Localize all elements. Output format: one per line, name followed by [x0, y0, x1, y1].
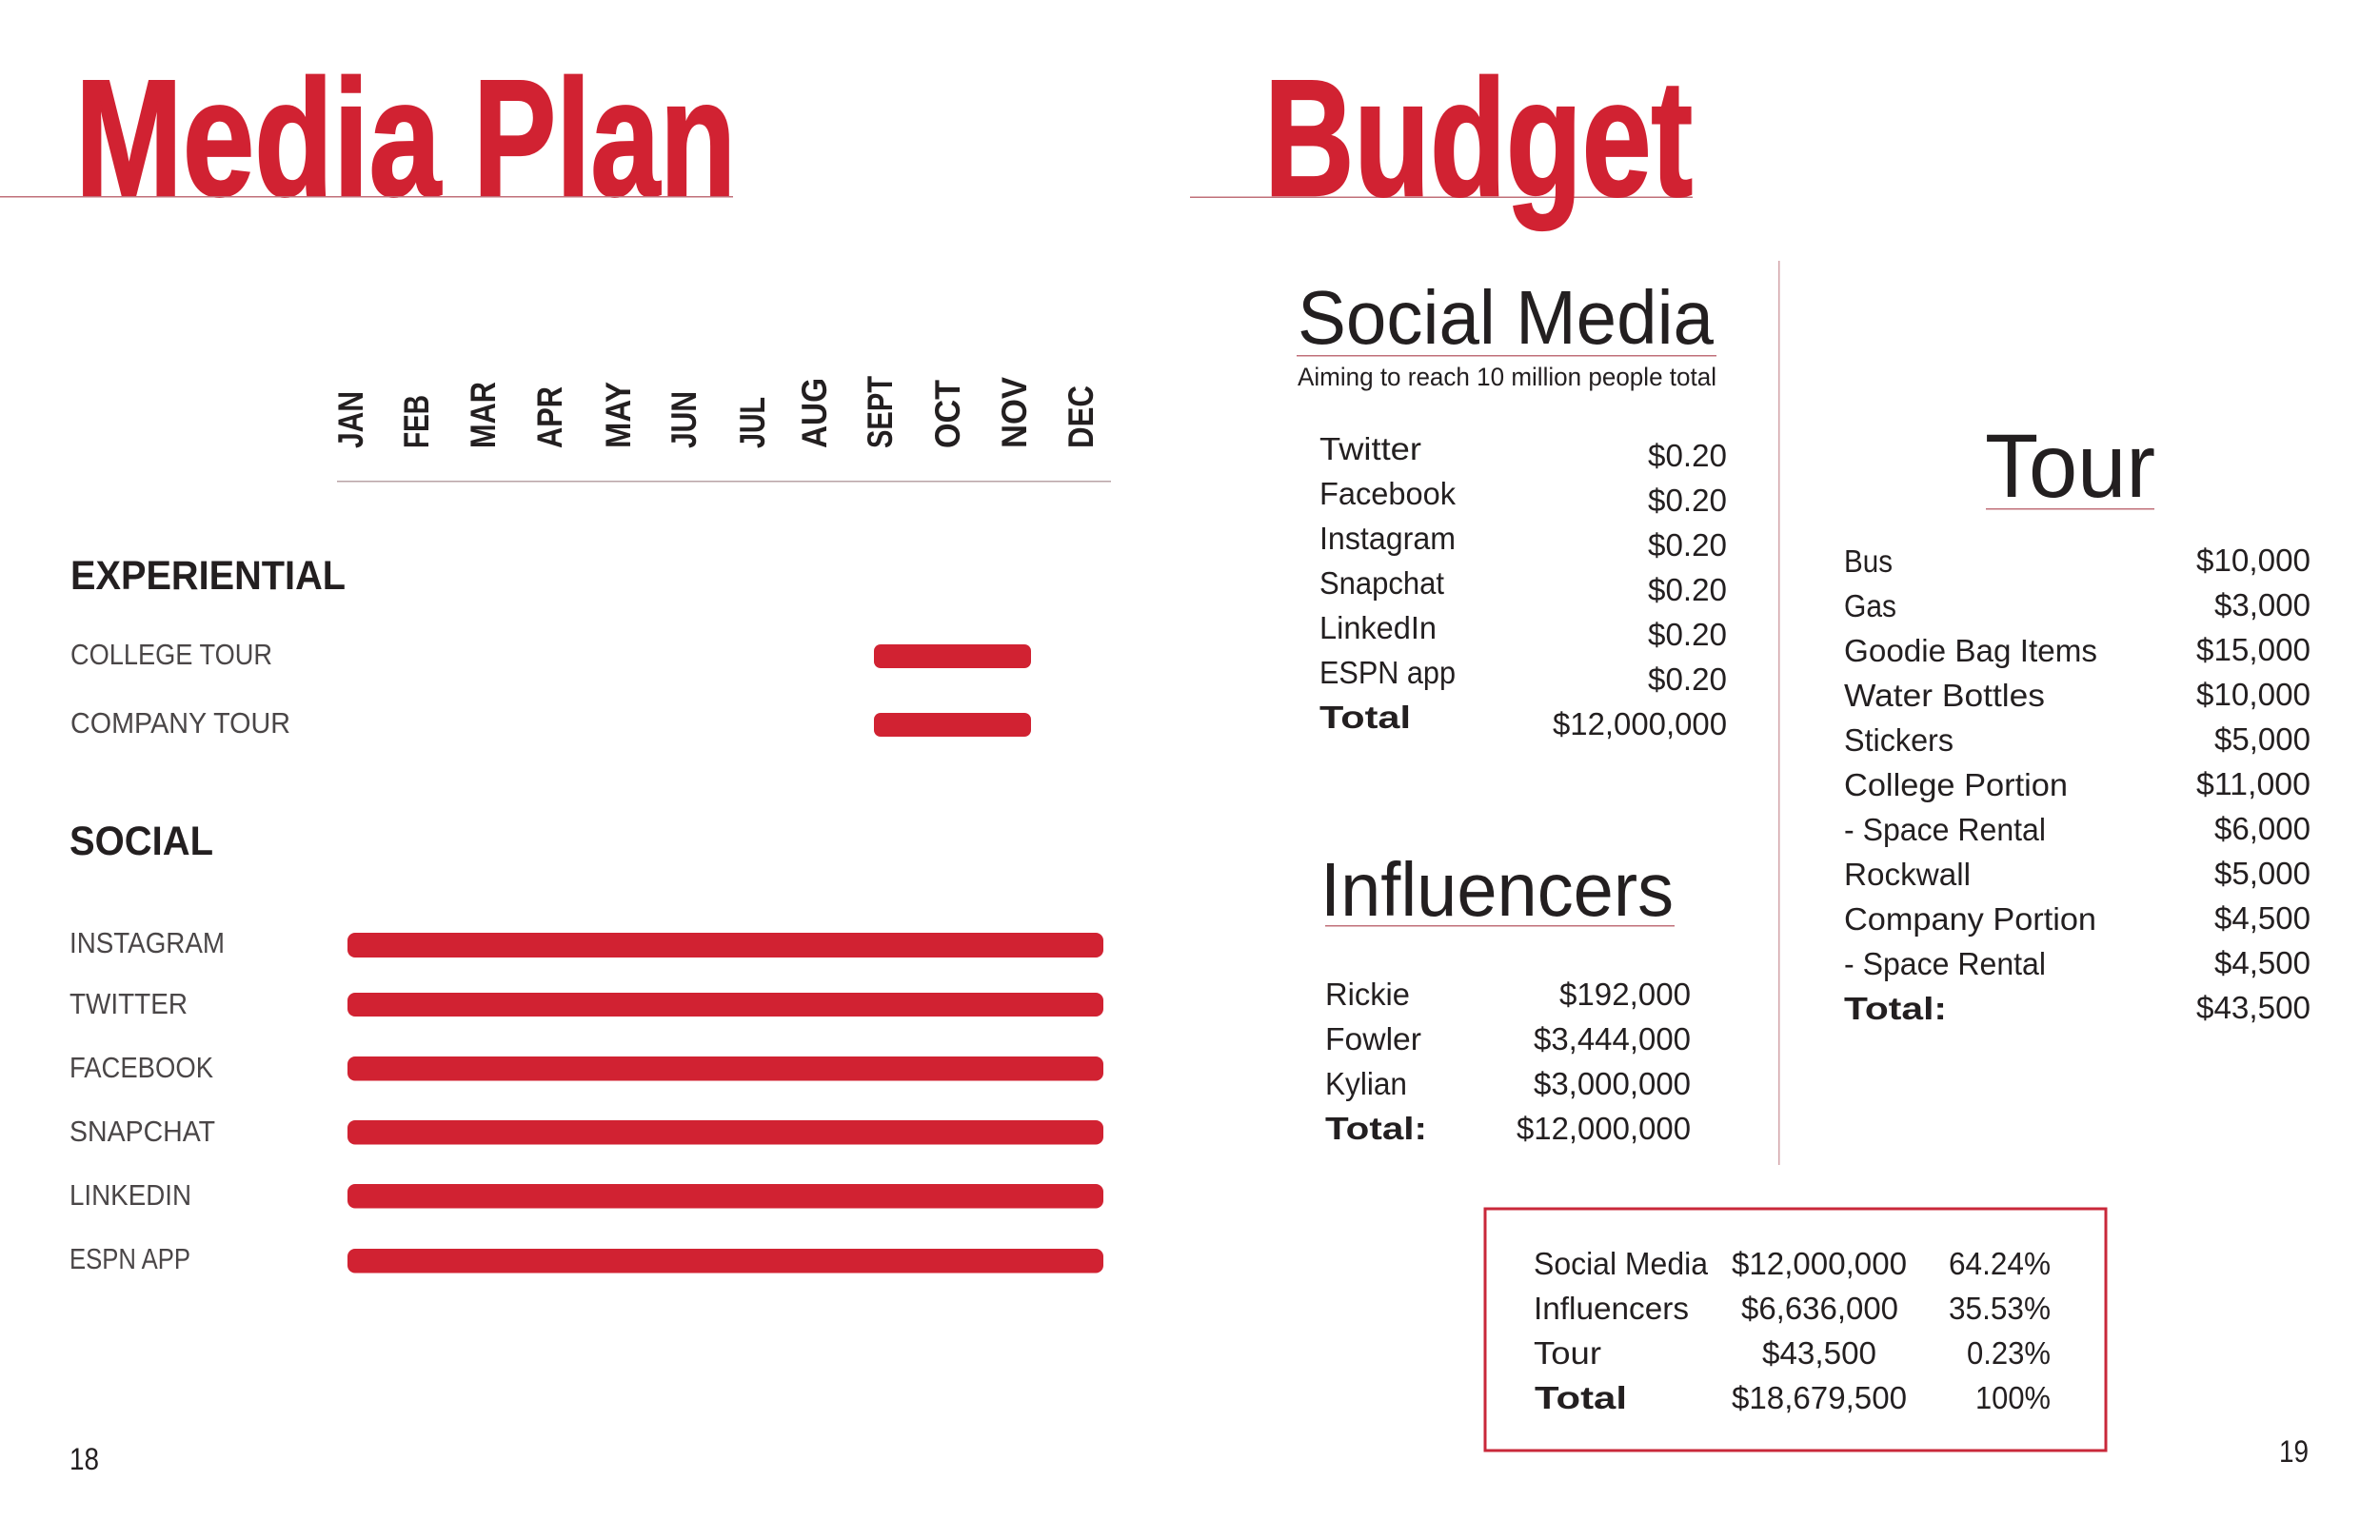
social media labels: Facebook — [1319, 476, 1456, 511]
tour labels: Rockwall — [1844, 857, 1971, 892]
summary row: social media: $12,000,000 — [1732, 1246, 1907, 1281]
summary row: influencers — [1534, 1291, 2051, 1326]
tour values: $11,000 — [2196, 766, 2311, 801]
tour labels — [1844, 543, 2097, 1026]
tour values: $10,000 — [2196, 677, 2311, 712]
tour labels: - Space Rental — [1844, 812, 2046, 847]
summary row: social media — [1534, 1246, 2051, 1281]
month axis header: AUG — [795, 378, 834, 448]
month axis header: JUN — [664, 391, 704, 448]
tour values: $6,000 — [2214, 811, 2311, 846]
tour values — [2196, 543, 2311, 1025]
summary row: tour: $43,500 — [1762, 1335, 1876, 1371]
social media labels: Total — [1319, 700, 1411, 735]
month axis header: APR — [530, 386, 569, 448]
month axis header: MAY — [599, 382, 638, 448]
section: social media budget — [1297, 275, 1727, 741]
row: snapchat — [69, 1115, 1103, 1148]
row: linkedin: LINKEDIN — [69, 1178, 191, 1212]
month axis header: MAR — [464, 382, 503, 448]
tour values: $4,500 — [2214, 945, 2311, 980]
section: influencers budget — [1320, 847, 1691, 1146]
summary row: total: $18,679,500 — [1732, 1380, 1907, 1415]
row: facebook — [69, 1051, 1103, 1084]
summary row: social media: 64.24% — [1949, 1246, 2051, 1281]
month axis header: NOV — [995, 377, 1034, 448]
row: espn app: ESPN APP — [69, 1242, 190, 1275]
heading: influencers: Influencers — [1320, 847, 1674, 932]
panel: media plan page — [0, 45, 1111, 1476]
social media values: $0.20 — [1648, 483, 1727, 518]
social media values: $12,000,000 — [1553, 706, 1727, 741]
row: twitter — [69, 987, 1103, 1020]
summary row: tour — [1534, 1335, 2051, 1371]
influencer labels: Rickie — [1325, 977, 1410, 1012]
row: company tour — [70, 706, 1031, 740]
summary row: influencers: Influencers — [1534, 1291, 1689, 1326]
tour labels: Gas — [1844, 588, 1896, 623]
social media values: $0.20 — [1648, 527, 1727, 563]
summary row: influencers: $6,636,000 — [1741, 1291, 1898, 1326]
social media labels — [1319, 431, 1456, 735]
row: instagram: INSTAGRAM — [69, 926, 225, 959]
tour values: $15,000 — [2196, 632, 2311, 667]
row: instagram — [69, 926, 1103, 959]
tour values: $5,000 — [2214, 721, 2311, 757]
tour values: $4,500 — [2214, 900, 2311, 936]
row: company tour: COMPANY TOUR — [70, 706, 290, 740]
month axis header: JUL — [733, 397, 772, 448]
summary row: tour: Tour — [1534, 1335, 1601, 1371]
month axis header: JAN — [331, 391, 370, 448]
column divider — [1778, 261, 1780, 1165]
social media labels: Instagram — [1319, 521, 1456, 556]
tour values: $5,000 — [2214, 856, 2311, 891]
tour labels: Goodie Bag Items — [1844, 633, 2097, 668]
month axis header: FEB — [397, 395, 436, 448]
title: Media Plan: Plan — [473, 45, 736, 230]
influencer labels — [1325, 977, 1427, 1146]
social media values: $0.20 — [1648, 661, 1727, 697]
tour labels: Bus — [1844, 543, 1893, 579]
social media labels: Twitter — [1319, 431, 1421, 466]
influencer values: $12,000,000 — [1517, 1111, 1691, 1146]
section: social — [69, 819, 1103, 1275]
social media values — [1553, 438, 1727, 741]
subheading: Aiming to reach 10 million people total — [1298, 363, 1716, 391]
page number 18: 18 — [69, 1442, 99, 1476]
title: Media Plan: Media — [75, 45, 442, 230]
summary row: social media: Social Media — [1534, 1246, 1709, 1281]
influencer labels: Total: — [1325, 1111, 1427, 1146]
month axis header — [331, 376, 1111, 482]
callout: budget summary box — [1485, 1209, 2106, 1451]
tour values: $3,000 — [2214, 587, 2311, 622]
row: linkedin — [69, 1178, 1103, 1212]
row: facebook: FACEBOOK — [69, 1051, 213, 1084]
heading: experiential: EXPERIENTIAL — [70, 553, 346, 599]
tour values: $10,000 — [2196, 543, 2311, 578]
influencer values — [1517, 977, 1691, 1146]
page number 19: 19 — [2279, 1434, 2309, 1469]
summary row: total: Total — [1535, 1380, 1627, 1415]
title: Media Plan — [0, 45, 736, 230]
tour labels: College Portion — [1844, 767, 2068, 802]
row: snapchat: SNAPCHAT — [69, 1115, 215, 1148]
section: tour budget — [1844, 416, 2311, 1026]
influencer labels: Fowler — [1325, 1021, 1421, 1056]
summary row: total: 100% — [1975, 1380, 2051, 1415]
tour labels: - Space Rental — [1844, 946, 2046, 981]
influencer labels: Kylian — [1325, 1066, 1407, 1101]
row: twitter: TWITTER — [69, 987, 188, 1020]
influencer values: $192,000 — [1559, 977, 1691, 1012]
month axis header: OCT — [928, 380, 967, 448]
influencer values: $3,000,000 — [1534, 1066, 1691, 1101]
social media labels: LinkedIn — [1319, 610, 1437, 645]
summary row: influencers: 35.53% — [1949, 1291, 2051, 1326]
social media values: $0.20 — [1648, 438, 1727, 473]
section: experiential — [70, 553, 1031, 740]
tour labels: Company Portion — [1844, 901, 2096, 937]
summary row: total — [1535, 1380, 2051, 1415]
month axis header: DEC — [1061, 385, 1101, 448]
tour values: $43,500 — [2196, 990, 2311, 1025]
tour labels: Total: — [1844, 991, 1947, 1026]
row: college tour — [70, 638, 1031, 671]
tour labels: Stickers — [1844, 722, 1954, 758]
social media values: $0.20 — [1648, 617, 1727, 652]
row: college tour: COLLEGE TOUR — [70, 638, 272, 671]
summary row: tour: 0.23% — [1967, 1335, 2051, 1371]
heading: social: SOCIAL — [69, 819, 213, 864]
social media values: $0.20 — [1648, 572, 1727, 607]
heading: tour: Tour — [1985, 416, 2155, 517]
social media labels: Snapchat — [1319, 565, 1444, 601]
month axis header: SEPT — [861, 376, 900, 448]
heading: social media: Social Media — [1298, 275, 1714, 360]
panel: budget page — [1190, 45, 2311, 1469]
social media labels: ESPN app — [1319, 655, 1456, 690]
influencer values: $3,444,000 — [1534, 1021, 1691, 1056]
title: Budget: Budget — [1264, 45, 1693, 230]
tour labels: Water Bottles — [1844, 678, 2045, 713]
row: espn app — [69, 1242, 1103, 1275]
